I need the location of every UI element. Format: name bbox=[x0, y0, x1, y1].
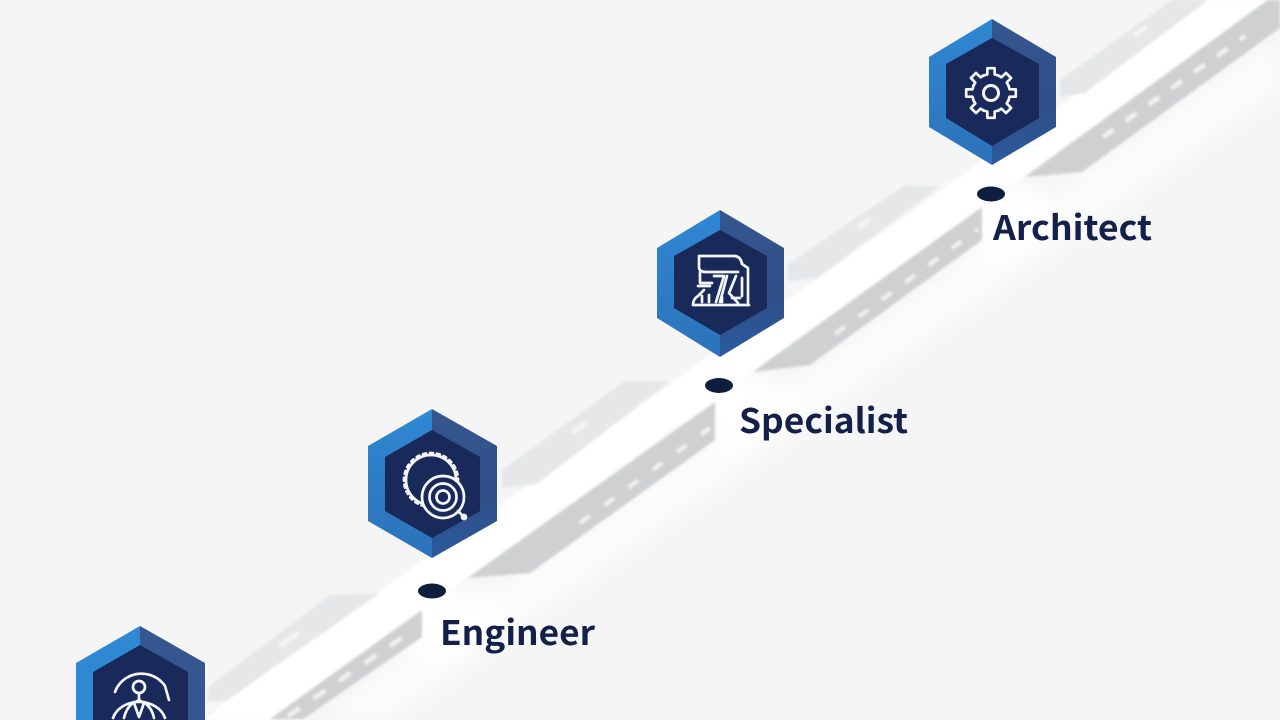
hexagon badge: engineer bbox=[368, 409, 497, 558]
soft glow beside the road bbox=[420, 196, 1052, 654]
road segment: specialist to architect bbox=[753, 185, 982, 372]
label: Specialist: Specialist bbox=[739, 394, 908, 443]
milestone dot: specialist bbox=[705, 378, 733, 393]
icon: gear bbox=[966, 68, 1016, 118]
milestone dot: engineer bbox=[418, 584, 446, 598]
label: Engineer: Engineer bbox=[440, 606, 595, 655]
road segment: beyond architect bbox=[1025, 0, 1280, 177]
hexagon badge: specialist bbox=[657, 210, 784, 357]
hexagon badge: novice bbox=[76, 626, 205, 720]
label: Architect: Architect bbox=[992, 201, 1152, 250]
icon: gear with magnifier bbox=[404, 453, 466, 519]
icon: blueprint scroll bbox=[693, 256, 749, 305]
hexagon badge: architect bbox=[929, 19, 1056, 165]
milestone dot: architect bbox=[977, 186, 1005, 202]
road segment: novice to engineer bbox=[208, 593, 422, 719]
icon: person with gear and globe bbox=[113, 674, 169, 718]
road segment: engineer to specialist bbox=[468, 381, 715, 578]
